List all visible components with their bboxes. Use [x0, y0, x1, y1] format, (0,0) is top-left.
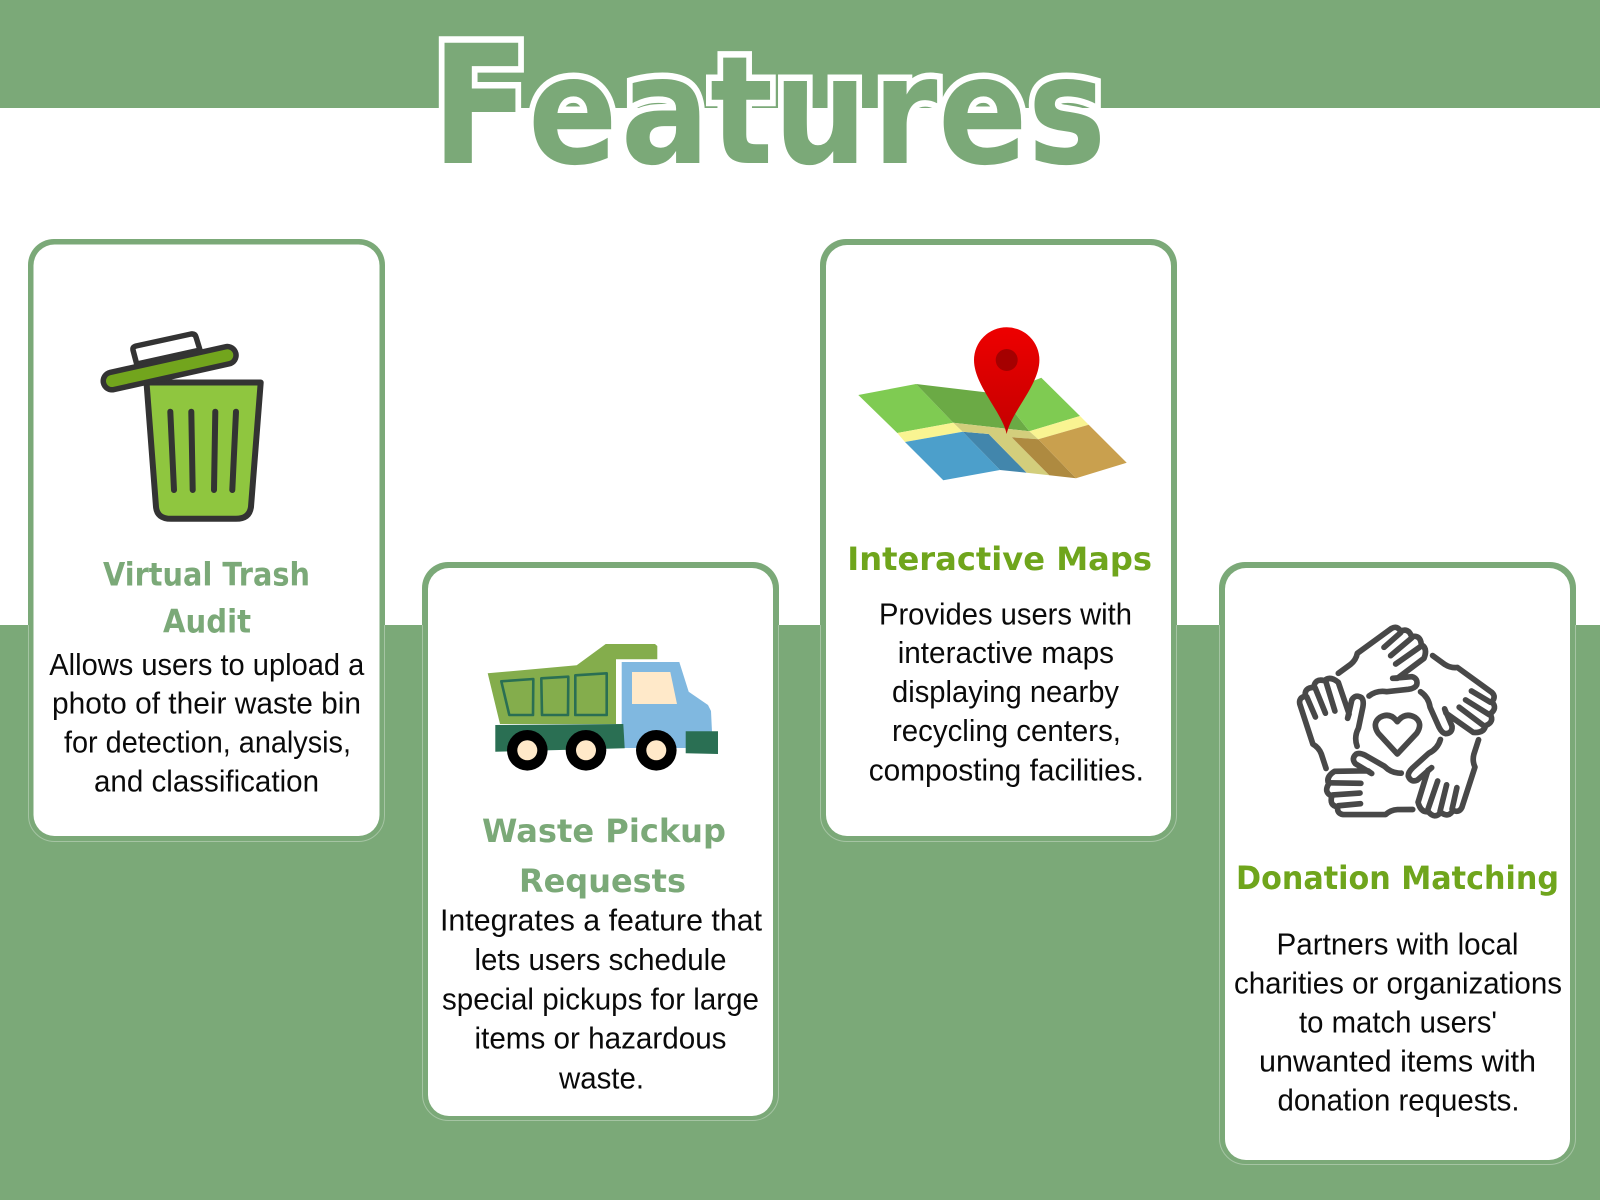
text: Waste Pickup Requests description: special pickups for large [442, 982, 759, 1016]
top green band [0, 0, 1600, 108]
panel: Waste Pickup Requests [422, 562, 779, 1121]
heading: Donation Matching: Donation Matching [1236, 859, 1559, 897]
text: Donation Matching description: to match users' [1299, 1006, 1497, 1040]
text: Donation Matching description: unwanted items with [1259, 1044, 1536, 1078]
text: Virtual Trash Audit description: for detection, analysis, [64, 726, 351, 760]
heading: Virtual Trash Audit: Virtual Trash [103, 556, 310, 594]
panel: Donation Matching [1219, 562, 1576, 1165]
text: Waste Pickup Requests description: Integrates a feature that [440, 904, 763, 938]
heading: Virtual Trash Audit [103, 556, 310, 640]
heading: Waste Pickup Requests: Waste Pickup [482, 812, 726, 850]
heading: Interactive Maps: Interactive Maps [847, 540, 1152, 578]
text: Virtual Trash Audit description: Allows users to upload a [49, 648, 364, 682]
text: Waste Pickup Requests description: items or hazardous [474, 1022, 726, 1056]
title: F [431, 10, 530, 202]
text: Donation Matching description [1234, 928, 1562, 1118]
panel: Interactive Maps [820, 239, 1177, 842]
text: Interactive Maps description: composting facilities. [869, 754, 1144, 788]
heading: Waste Pickup Requests: Requests [519, 862, 686, 900]
text: Interactive Maps description: displaying nearby [892, 675, 1120, 709]
text: Donation Matching description: donation requests. [1278, 1084, 1520, 1118]
icon: trash bin [112, 334, 261, 519]
text: Waste Pickup Requests description: waste. [558, 1062, 644, 1096]
icon: map with pin [858, 327, 1127, 480]
panel: Virtual Trash Audit [28, 239, 385, 842]
text: Interactive Maps description: recycling centers, [892, 714, 1121, 748]
heading: Waste Pickup Requests [482, 812, 726, 900]
heading: Virtual Trash Audit: Audit [163, 602, 251, 640]
text: Interactive Maps description: interactive maps [898, 636, 1114, 670]
text: Interactive Maps description: Provides users with [879, 598, 1132, 632]
text: Virtual Trash Audit description: and classification [94, 765, 319, 799]
text: Interactive Maps description [869, 598, 1144, 788]
text: Waste Pickup Requests description [440, 904, 763, 1096]
text: Virtual Trash Audit description: photo of their waste bin [52, 687, 361, 721]
text: Donation Matching description: Partners with local [1276, 928, 1518, 962]
icon: dump truck [488, 644, 718, 771]
text: Donation Matching description: charities or organizations [1234, 966, 1562, 1000]
text: Virtual Trash Audit description [49, 648, 364, 799]
text: Waste Pickup Requests description: lets users schedule [474, 943, 726, 977]
title: eatures [528, 25, 1106, 199]
icon: five hands with heart [1282, 627, 1506, 847]
bottom green band [0, 625, 1600, 1200]
